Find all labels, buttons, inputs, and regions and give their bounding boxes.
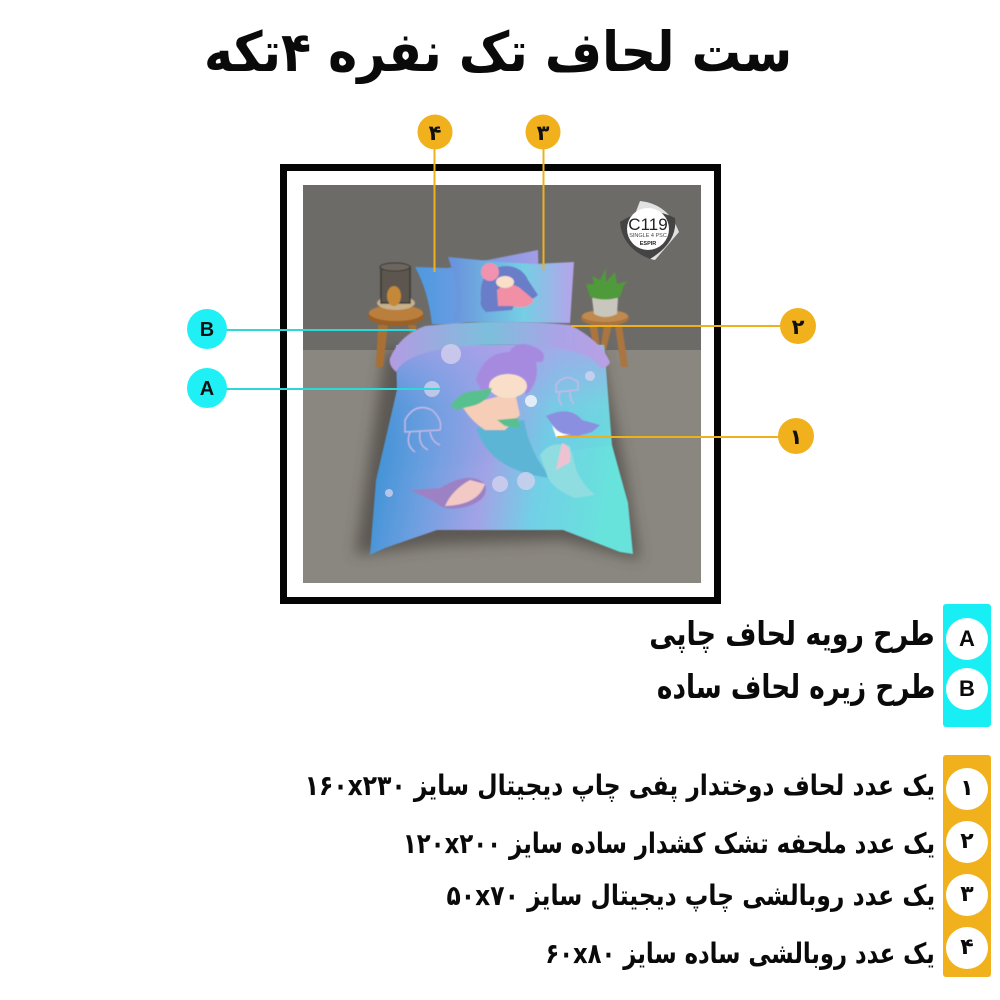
marker 1 xyxy=(778,418,814,454)
bed illustration: bubbles xyxy=(385,344,595,497)
bedside table right xyxy=(581,310,629,367)
badge 4 xyxy=(946,927,988,969)
product photo diagram with callouts xyxy=(187,114,816,604)
marker 3 xyxy=(526,114,560,150)
bed illustration: mermaid xyxy=(451,344,595,498)
text: item 1: یک عدد لحاف دوختدار پفی چاپ دیجیتال سایز ۱۶۰x۲۳۰ xyxy=(305,769,935,802)
potted plant xyxy=(586,268,628,317)
lamp xyxy=(377,263,415,310)
pillow 3: printed pillow xyxy=(448,257,574,323)
marker 4: ۴ xyxy=(429,121,442,145)
bedside table left xyxy=(368,305,424,367)
bed illustration: jellyfish xyxy=(405,378,578,452)
badge 2 xyxy=(946,821,988,863)
callout line 4 xyxy=(434,140,436,272)
bed illustration: small dolphin xyxy=(546,411,600,437)
badge 3 xyxy=(946,874,988,916)
legend panel: items xyxy=(943,755,991,977)
duvet upper shading xyxy=(376,345,612,480)
callout line 2 xyxy=(571,325,790,327)
title: ست لحاف تک نفره ۴تکه xyxy=(204,20,792,84)
marker B: B xyxy=(200,319,214,341)
text: item 4: یک عدد روبالشی ساده سایز ۶۰x۸۰ xyxy=(546,937,935,970)
frame xyxy=(284,168,718,600)
marker 1: ۱ xyxy=(790,425,802,449)
brand badge: ESPIR xyxy=(640,241,656,247)
badge 1: ۱ xyxy=(960,776,974,801)
badge 1 xyxy=(946,768,988,810)
bed illustration: big dolphin xyxy=(410,478,486,509)
photo: bed scene xyxy=(303,185,701,583)
bed shadow xyxy=(355,350,640,560)
marker A xyxy=(187,368,227,408)
callout line 3 xyxy=(542,140,544,270)
badge 2: ۲ xyxy=(960,829,974,854)
text: item 3: یک عدد روبالشی چاپ دیجیتال سایز ۵۰x۷۰ xyxy=(446,879,935,912)
badge A: A xyxy=(959,626,975,651)
legend panel: designs xyxy=(943,604,991,727)
text: design A: طرح رویه لحاف چاپی xyxy=(650,614,935,653)
badge 4: ۴ xyxy=(960,935,974,960)
badge 3: ۳ xyxy=(960,882,974,907)
marker 3: ۳ xyxy=(537,121,550,145)
callout line B xyxy=(215,329,416,331)
wall and floor xyxy=(303,185,701,583)
brand badge: SINGLE 4 PSC xyxy=(629,233,667,239)
duvet body xyxy=(370,345,633,555)
pillow 4: plain pillow xyxy=(415,250,539,325)
text: item 2: یک عدد ملحفه تشک کشدار ساده سایز ۱۲۰x۲۰۰ xyxy=(403,827,935,860)
callout line A xyxy=(215,388,440,390)
marker B xyxy=(187,309,227,349)
brand badge xyxy=(620,201,679,260)
pillow character xyxy=(481,263,538,312)
duvet top fold xyxy=(390,322,610,372)
marker 2: ۲ xyxy=(792,315,805,339)
badge B xyxy=(946,668,988,710)
callout line 1 xyxy=(557,436,790,438)
marker A: A xyxy=(200,378,214,400)
marker 4 xyxy=(418,114,452,150)
brand badge: C119 xyxy=(628,215,668,234)
badge B: B xyxy=(959,676,975,701)
badge A xyxy=(946,618,988,660)
text: design B: طرح زیره لحاف ساده xyxy=(657,667,935,706)
marker 2 xyxy=(780,308,816,344)
